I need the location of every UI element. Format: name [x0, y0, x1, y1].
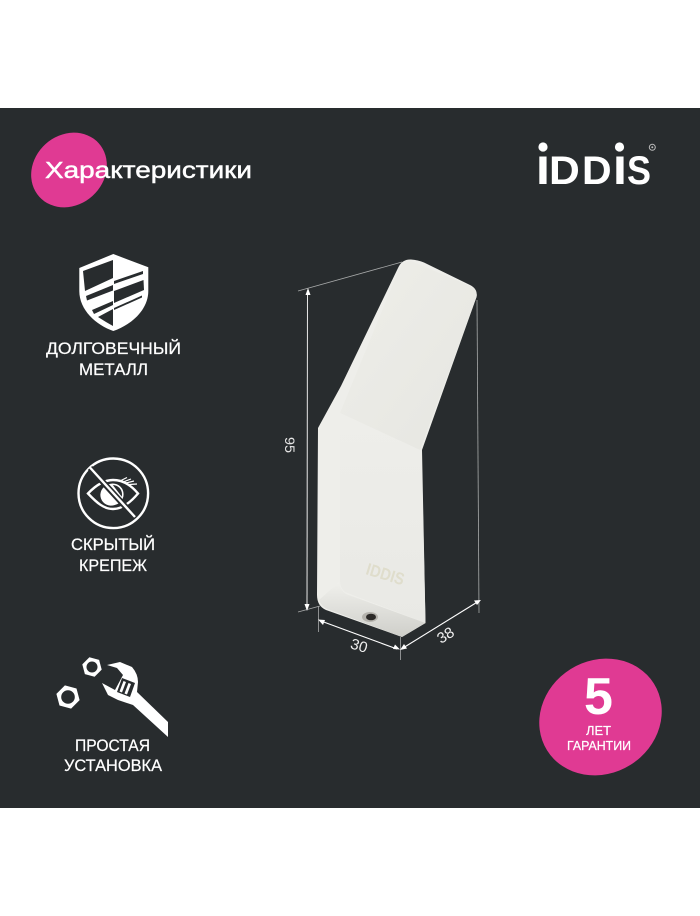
- label: скрытый крепеж: СКРЫТЫЙ: [71, 535, 155, 554]
- logo: IDDIS: I: [536, 149, 550, 193]
- icon: wrench and nuts: [56, 657, 168, 737]
- badge: 5 лет гарантии: ГАРАНТИИ: [567, 739, 631, 753]
- label: скрытый крепеж: КРЕПЕЖ: [79, 557, 148, 575]
- upper face: [340, 261, 477, 450]
- dimension: width 30: 30: [348, 636, 370, 657]
- label: простая установка: [64, 737, 162, 775]
- label: долговечный металл: ДОЛГОВЕЧНЫЙ: [46, 339, 181, 358]
- icon: shield: [79, 254, 148, 331]
- logo: IDDIS: I: [613, 149, 627, 193]
- icon: crossed-out eye: [78, 458, 148, 528]
- dark background panel: [0, 108, 700, 808]
- dimension: depth 38: 38: [434, 624, 458, 647]
- label: долговечный металл: [46, 339, 181, 379]
- engraved logo: IDDIS: [364, 560, 407, 589]
- logo: IDDIS: D: [549, 149, 580, 193]
- dimension: height 95: 95: [282, 437, 298, 453]
- dimension: height 95: [282, 262, 402, 612]
- label: простая установка: УСТАНОВКА: [64, 757, 162, 775]
- screw: [362, 612, 378, 622]
- badge: 5 лет гарантии: ЛЕТ: [586, 724, 611, 738]
- lower lip: [319, 582, 426, 637]
- lower front face: [340, 413, 426, 623]
- hook silhouette: [317, 259, 477, 637]
- label: скрытый крепеж: [71, 535, 155, 575]
- heading: Характеристики: Характеристики: [45, 157, 252, 183]
- badge: 5 лет гарантии: 5: [584, 668, 613, 726]
- product: white wall hook: [317, 259, 477, 637]
- logo: IDDIS: [536, 142, 655, 193]
- heading: Характеристики: [16, 117, 252, 223]
- badge: 5 лет гарантии: [517, 636, 684, 798]
- logo: IDDIS: S: [627, 149, 651, 193]
- label: долговечный металл: МЕТАЛЛ: [79, 361, 148, 379]
- dimension: width 30: [318, 606, 400, 660]
- label: простая установка: ПРОСТАЯ: [75, 737, 150, 755]
- dimension: depth 38: [400, 300, 481, 650]
- logo: IDDIS: D: [582, 149, 612, 193]
